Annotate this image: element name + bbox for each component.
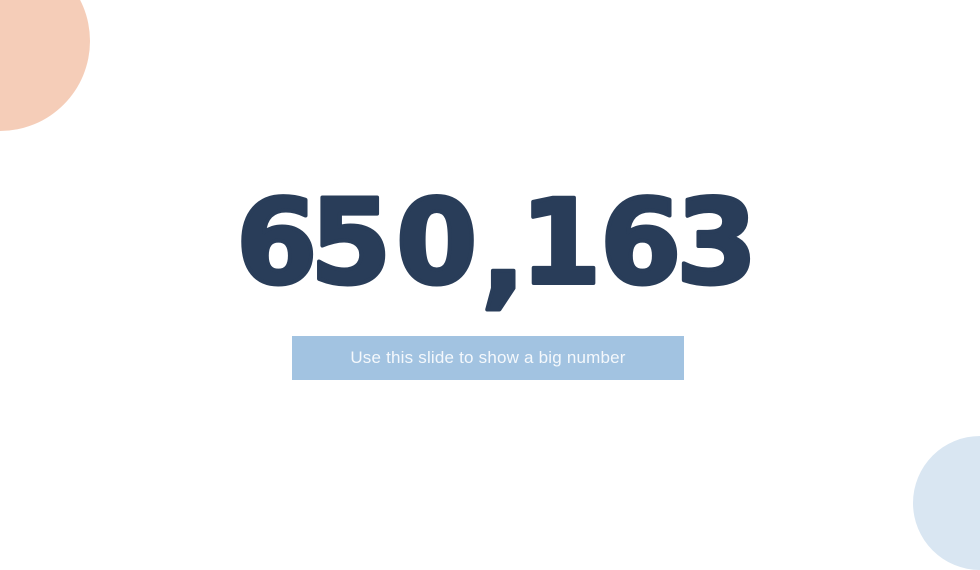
caption bar [292, 336, 684, 380]
decorative circle: top left peach [0, 0, 90, 131]
big number: 650,163 [236, 174, 757, 321]
caption bar: Use this slide to show a big number [350, 348, 626, 367]
decorative circle: bottom right light blue [913, 436, 980, 570]
